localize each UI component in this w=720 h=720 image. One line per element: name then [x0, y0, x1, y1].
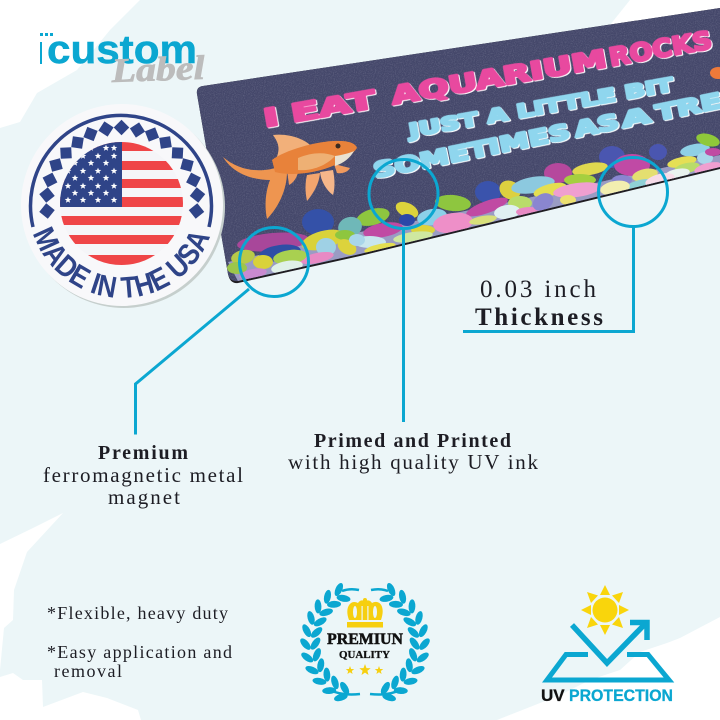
text: feature notes: *Flexible, heavy duty: [47, 603, 228, 623]
laurel left: [298, 580, 360, 707]
magnet headline text: I: [261, 102, 281, 133]
badge flag: [60, 142, 184, 266]
text: PROTECTION: PROTECTION: [569, 686, 673, 705]
icon: goldfish: [223, 135, 357, 219]
text: premium magnet: ferromagnetic metal: [43, 463, 243, 487]
text: thickness: 0.03 inch: [480, 276, 596, 303]
text: premium magnet: [43, 442, 243, 509]
magnet product photo: [190, 0, 720, 290]
text: primed and printed: Primed and Printed: [314, 430, 511, 452]
magnet subline two: [371, 80, 720, 183]
document outline: [547, 654, 669, 680]
orange fish at right edge: [710, 67, 720, 79]
badge curved text: MADE IN THE USA: [33, 226, 210, 298]
pebble border: [227, 131, 720, 285]
magnet subline two: A: [619, 103, 654, 132]
callout: primed and printed ring and leader: [369, 160, 438, 422]
magnet headline text: AQUARIUM: [389, 44, 609, 110]
check arrow: [572, 622, 647, 663]
logo: iCustom Label: Label: [110, 50, 206, 90]
text: primed and printed: with high quality UV ink: [288, 450, 538, 474]
text: thickness: [475, 276, 603, 331]
callout: premium magnet ring and leader: [136, 228, 308, 434]
callout: thickness ring and leader: [463, 158, 668, 332]
text: QUALITY: QUALITY: [339, 650, 391, 661]
text: premium magnet: magnet: [108, 485, 180, 509]
text: primed and printed: [288, 430, 538, 474]
sun: [581, 585, 629, 635]
magnet subline two: AS: [572, 110, 621, 142]
badge: premium quality laurel: [298, 580, 432, 707]
magnet subline one: JUST A LITTLE BIT: [404, 74, 675, 142]
rating stars: [346, 664, 383, 675]
text: PREMIUN: PREMIUN: [327, 631, 403, 648]
magnet subline two: SOMETIMES: [371, 120, 572, 183]
text: UV: UV: [541, 686, 565, 705]
laurel right: [370, 580, 432, 707]
text: thickness: Thickness: [475, 304, 603, 331]
badge diamond ring: [39, 120, 205, 219]
text: premium magnet: Premium: [98, 442, 188, 464]
magnet headline text: ROCKS: [607, 25, 714, 72]
icon: crown: [347, 598, 383, 628]
icon: UV protection: [541, 585, 673, 705]
logo: iCustom Label: [40, 28, 206, 90]
text: feature notes: [47, 603, 232, 681]
logo: iCustom Label: custom: [47, 28, 197, 72]
badge: Made in the USA: [21, 104, 225, 308]
magnet headline text: EAT: [289, 85, 377, 128]
magnet headline text: [261, 25, 714, 133]
text: feature notes: removal: [54, 661, 122, 681]
text: feature notes: *Easy application and: [47, 642, 232, 662]
badge arc: [31, 115, 211, 227]
